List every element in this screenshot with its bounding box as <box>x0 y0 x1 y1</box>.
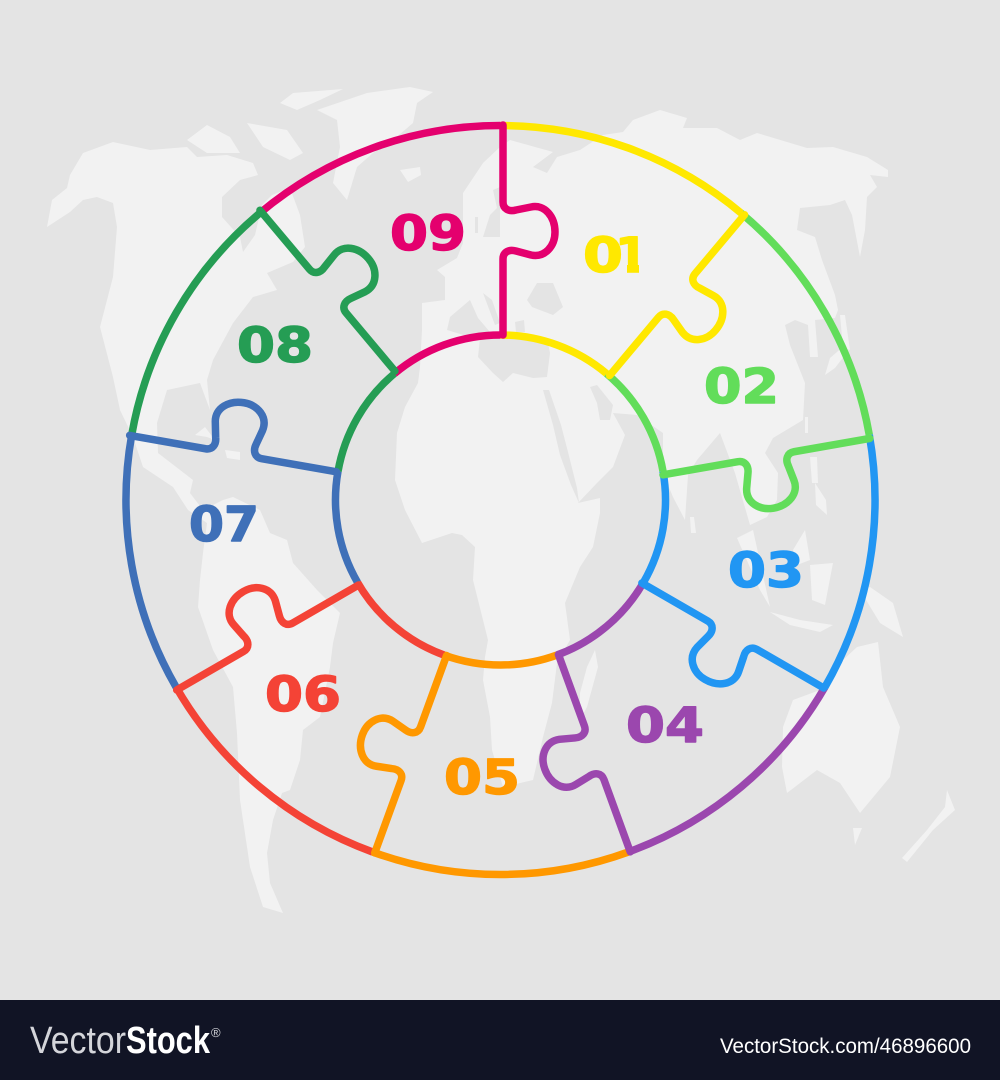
continent: Greenland <box>317 87 433 200</box>
label 02: 02 <box>704 359 779 415</box>
sea: Persian Gulf <box>590 385 613 420</box>
connector: piece 04 to 05 <box>510 655 630 870</box>
islands: Canadian Arctic <box>187 89 343 160</box>
island: Tasmania <box>853 828 862 845</box>
arc: piece 05 <box>318 619 629 934</box>
inland seas <box>447 187 613 503</box>
arc: piece 08 <box>132 198 418 478</box>
sea: Adriatic <box>483 293 500 325</box>
continent: Australia <box>782 642 900 813</box>
label 08: 08 <box>237 318 313 374</box>
island: New Zealand <box>902 790 955 862</box>
label 01 <box>584 235 639 274</box>
continent: the Americas <box>47 142 340 913</box>
sea: Black Sea <box>527 283 563 315</box>
sea: Baltic <box>475 187 500 237</box>
label 06: 06 <box>265 667 341 723</box>
connector: piece 01 to 02 <box>610 215 784 409</box>
number labels <box>189 206 804 806</box>
footer url: VectorStock.com/46896600 <box>720 1035 971 1058</box>
sea: small bay <box>515 320 525 332</box>
arc: piece 01 <box>500 126 741 374</box>
label 05: 05 <box>444 750 520 806</box>
label 09: 09 <box>390 206 466 262</box>
islands: Indonesia <box>737 530 833 632</box>
islands: Sri Lanka and Philippines <box>690 457 827 533</box>
label 04: 04 <box>626 698 704 754</box>
puzzle ring <box>56 58 926 934</box>
island: Iceland <box>400 167 421 182</box>
arc: piece 06 <box>146 536 457 852</box>
connector: piece 02 to 03 <box>663 438 879 526</box>
label 03: 03 <box>728 543 804 599</box>
island: Madagascar <box>580 650 598 720</box>
arc: piece 02 <box>582 213 926 558</box>
sea: western Mediterranean <box>447 300 495 340</box>
connector: piece 08 to 09 <box>260 177 435 371</box>
footer logo: Stock <box>126 1020 211 1062</box>
connector: piece 03 to 04 <box>616 583 824 733</box>
islands: Caribbean <box>195 427 240 460</box>
label 07: 07 <box>189 497 259 553</box>
footer logo: Vector <box>30 1020 126 1062</box>
connector: piece 09 to 01 <box>503 125 555 335</box>
connector: piece 06 to 07 <box>151 540 359 690</box>
continents: Eurasia and Africa <box>395 110 888 787</box>
arc: piece 07 <box>56 355 391 687</box>
footer logo: ® <box>211 1025 221 1040</box>
sea: Red Sea <box>543 390 579 503</box>
world map <box>47 87 955 913</box>
arc: piece 03 <box>625 435 911 715</box>
sea: eastern Mediterranean <box>478 338 550 382</box>
footer bar <box>0 1000 1000 1080</box>
islands: Japan, Sakhalin and Taiwan <box>805 315 850 433</box>
arc: piece 09 <box>260 58 604 403</box>
footer logo <box>30 1020 221 1062</box>
label 01: 1 <box>615 228 648 284</box>
puzzle connectors <box>130 125 879 870</box>
arc: piece 04 <box>490 563 825 896</box>
connector: piece 07 to 08 <box>130 384 346 472</box>
island: New Guinea <box>860 587 903 637</box>
label 01: 0 <box>583 228 623 284</box>
connector: piece 05 to 06 <box>326 638 447 853</box>
ring arcs <box>56 58 926 934</box>
